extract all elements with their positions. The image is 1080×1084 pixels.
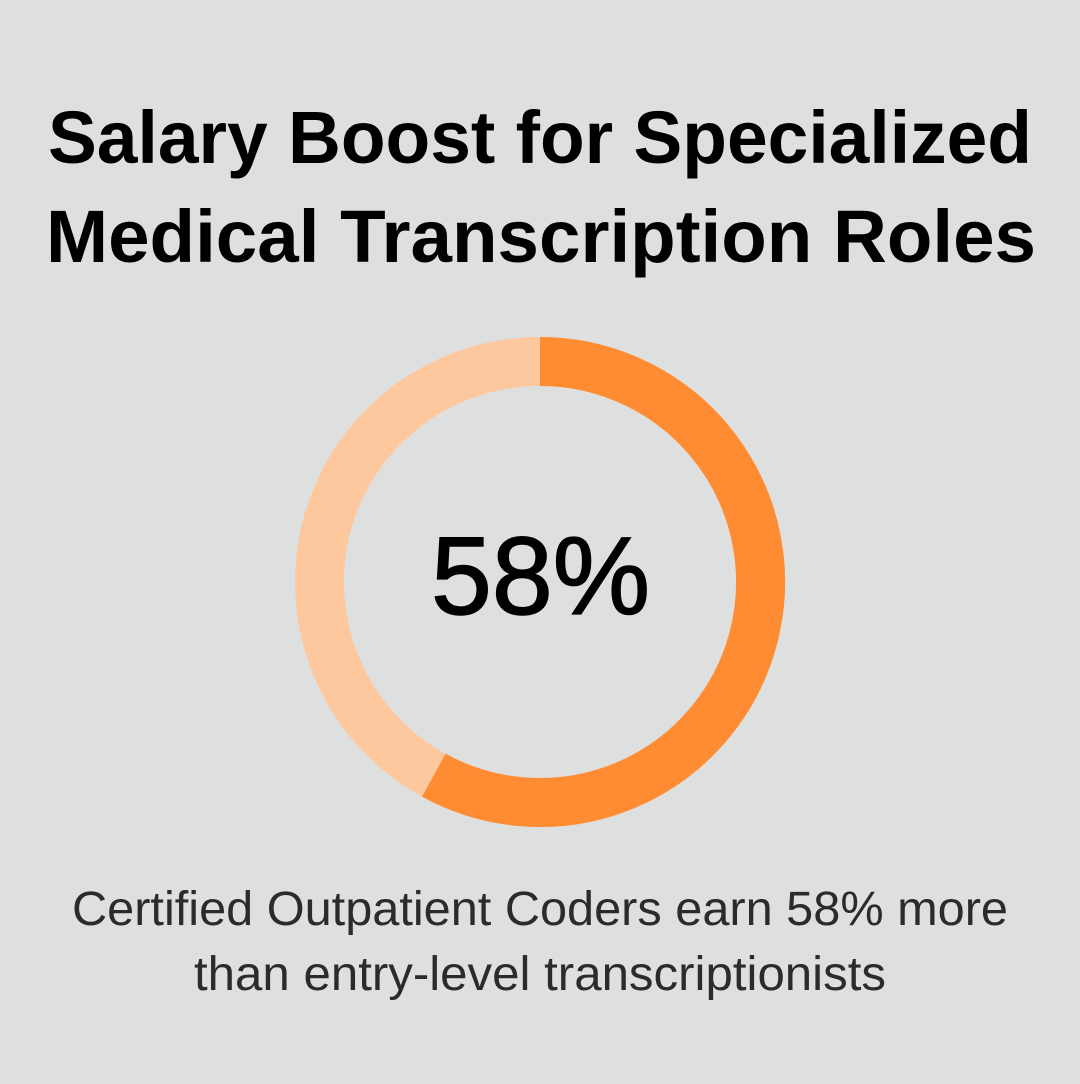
title: Salary Boost for Specialized — [48, 96, 1032, 179]
remaining share ring — [320, 362, 760, 802]
caption: than entry-level transcriptionists — [194, 948, 886, 1001]
caption — [72, 883, 1008, 1001]
58 percent arc — [434, 362, 761, 802]
center value: 58% — [431, 515, 650, 638]
title — [46, 96, 1036, 278]
donut chart: 58 percent — [320, 362, 761, 802]
title: Medical Transcription Roles — [46, 195, 1036, 278]
caption: Certified Outpatient Coders earn 58% more — [72, 883, 1008, 936]
